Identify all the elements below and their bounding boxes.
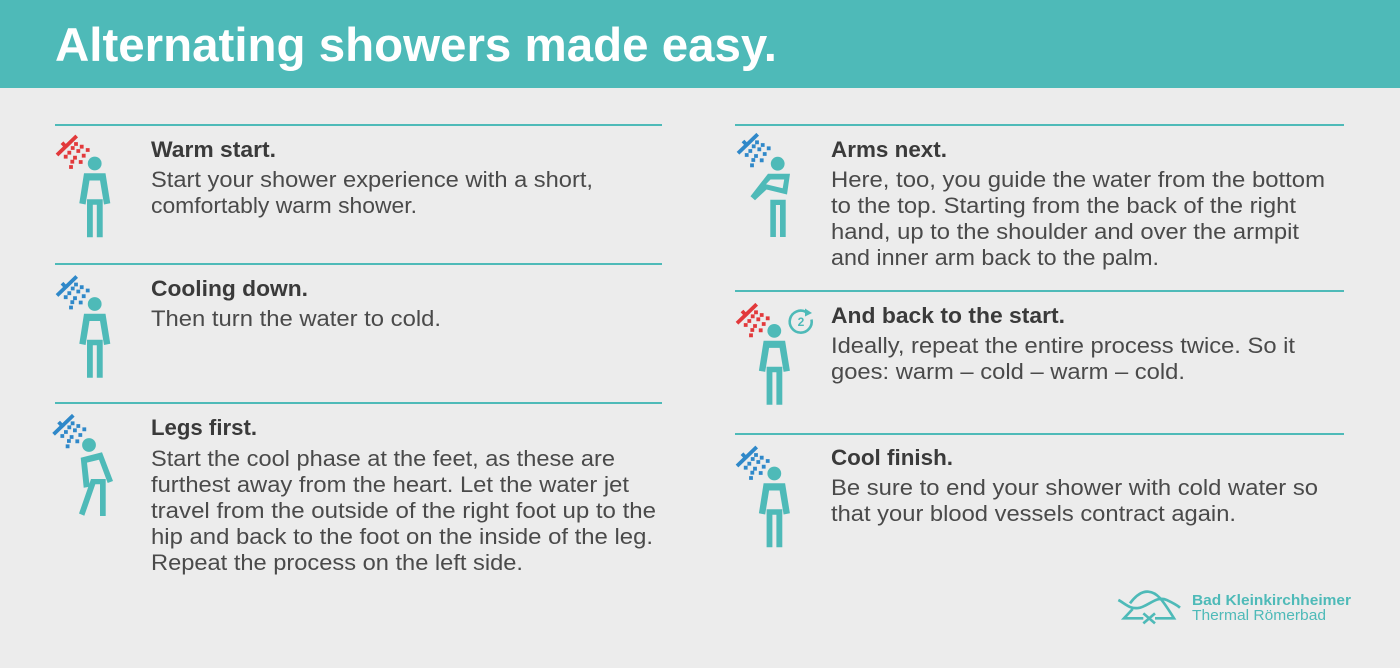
text block <box>151 446 656 575</box>
icon: repeat twice <box>790 308 812 333</box>
panel: cool finish <box>735 433 1344 547</box>
text block <box>831 475 1318 526</box>
text block: Start your shower experience with a short, <box>151 167 593 192</box>
panel: cooling down <box>55 263 662 378</box>
heading: And back to the start. <box>831 303 1065 328</box>
logo text: Thermal Römerbad <box>1192 607 1326 624</box>
text block: Ideally, repeat the entire process twice. So it <box>831 333 1295 358</box>
icon: cold shower over figure with raised arm <box>738 134 790 237</box>
text block: Be sure to end your shower with cold water so <box>831 475 1318 500</box>
logo text: Bad Kleinkirchheimer <box>1192 592 1351 609</box>
icon: cold shower over figure <box>737 447 790 547</box>
title: Alternating showers made easy. <box>55 18 777 71</box>
text block: Repeat the process on the left side. <box>151 550 523 575</box>
icon: warm shower over standing figure <box>57 136 110 237</box>
text block: Then turn the water to cold. <box>151 306 441 331</box>
text block: to the top. Starting from the back of the right <box>831 193 1296 218</box>
icon: logo mark <box>1118 592 1180 623</box>
text block: furthest away from the heart. Let the water jet <box>151 472 629 497</box>
text block: hand, up to the shoulder and over the armpit <box>831 219 1299 244</box>
logo text <box>1192 592 1351 624</box>
text block: and inner arm back to the palm. <box>831 245 1159 270</box>
text block: travel from the outside of the right foot up to the <box>151 498 656 523</box>
heading: Legs first. <box>151 415 257 440</box>
icon: cold shower over standing figure <box>57 276 110 378</box>
heading: Cool finish. <box>831 445 953 470</box>
heading: Arms next. <box>831 137 947 162</box>
panel: warm start <box>55 124 662 237</box>
icon: repeat twice: 2 <box>798 315 805 329</box>
text block: goes: warm – cold – warm – cold. <box>831 359 1185 384</box>
text block <box>151 167 593 218</box>
text block <box>831 167 1325 270</box>
text block: Here, too, you guide the water from the bottom <box>831 167 1325 192</box>
text block: Start the cool phase at the feet, as these are <box>151 446 615 471</box>
panel: arms next <box>735 124 1344 270</box>
logo <box>1118 592 1351 624</box>
panel: back to the start <box>735 290 1344 405</box>
panel: legs first <box>54 402 662 575</box>
heading: Cooling down. <box>151 276 308 301</box>
icon: cold shower over figure stepping forward <box>54 415 113 516</box>
text block: hip and back to the foot on the inside of the leg. <box>151 524 653 549</box>
text block: that your blood vessels contract again. <box>831 501 1236 526</box>
text block <box>831 333 1295 384</box>
heading: Warm start. <box>151 137 276 162</box>
header band <box>0 0 1400 88</box>
text block: comfortably warm shower. <box>151 193 417 218</box>
icon: warm shower over figure <box>737 304 790 405</box>
